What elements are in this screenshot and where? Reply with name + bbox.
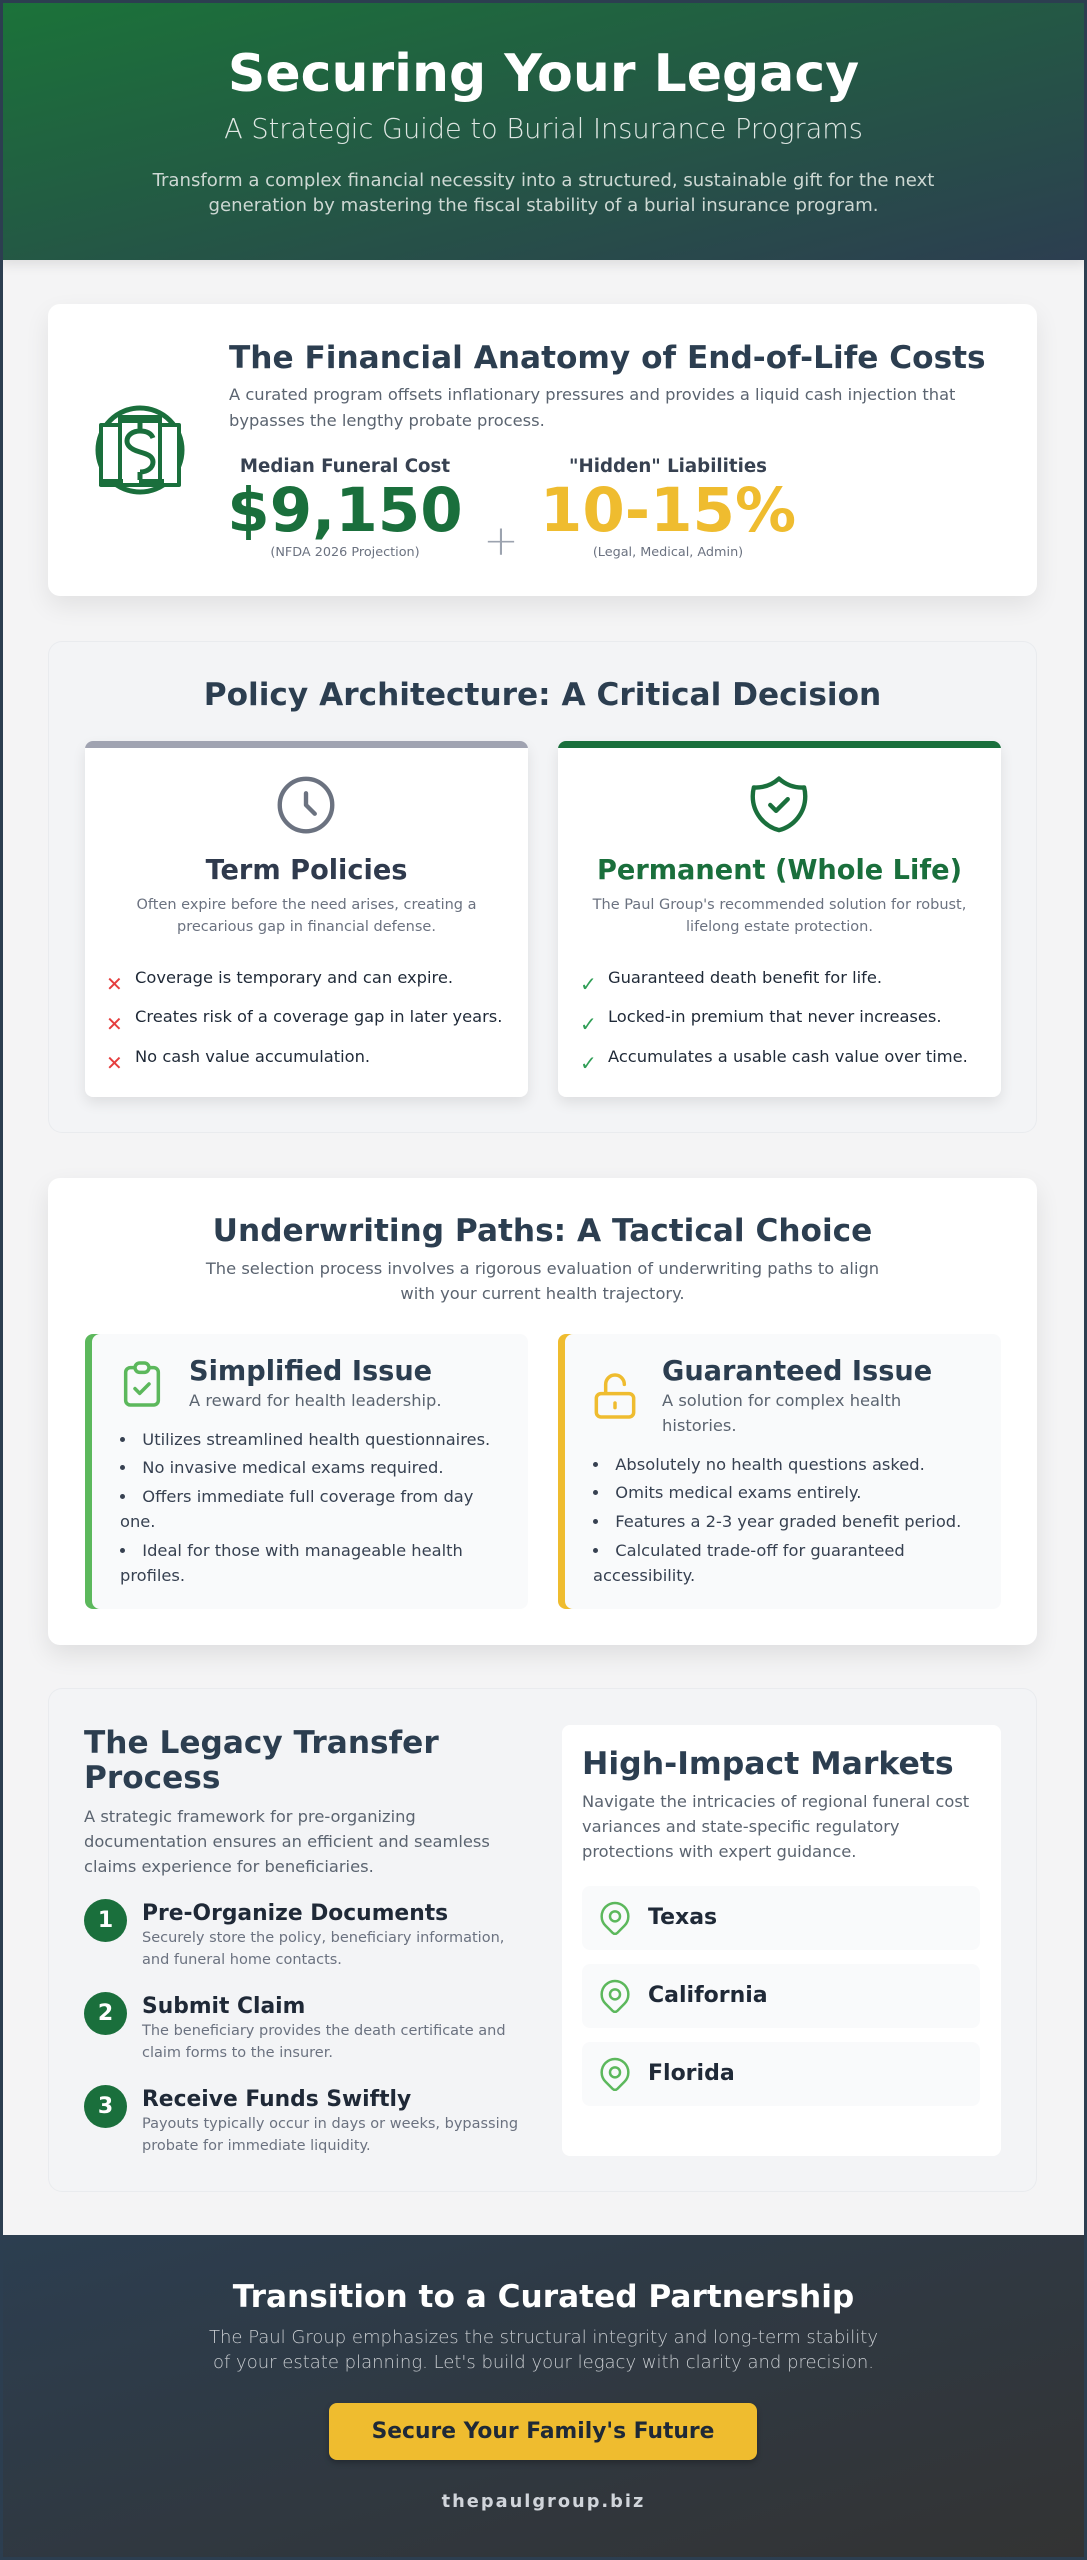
card heading: Term Policies — [206, 855, 407, 886]
card top bar — [85, 741, 528, 748]
panel: underwriting paths — [48, 1178, 1037, 1645]
list: term drawbacks — [106, 968, 502, 1074]
list: term drawbacks: ✕ — [106, 1050, 123, 1074]
section text: A strategic framework for pre-organizing — [84, 1806, 416, 1826]
card heading: Permanent (Whole Life) — [597, 855, 962, 886]
market name: Florida — [648, 2061, 735, 2086]
section heading: Underwriting Paths: A Tactical Choice — [213, 1213, 872, 1249]
step 3 — [84, 2085, 518, 2154]
bullet list: Utilizes streamlined health questionnaires. — [142, 1430, 490, 1448]
panel: policy architecture — [48, 641, 1037, 1133]
bullet list: Absolutely no health questions asked. — [615, 1454, 925, 1474]
panel: legacy transfer and markets — [48, 1688, 1037, 2192]
website link: thepaulgroup.biz — [442, 2491, 645, 2512]
card top bar — [558, 741, 1001, 748]
card heading: High-Impact Markets — [582, 1746, 954, 1782]
list: permanent benefits: ✓ — [580, 1012, 597, 1036]
title: Securing Your Legacy — [228, 44, 859, 104]
step text — [142, 1930, 504, 1968]
section text — [84, 1806, 490, 1876]
call to action button: Secure Your Family's Future — [372, 2419, 714, 2444]
section text — [229, 385, 955, 430]
step number: 3 — [98, 2094, 113, 2119]
card description: lifelong estate protection. — [686, 919, 873, 935]
section heading: Process — [84, 1760, 220, 1796]
step number — [84, 2085, 127, 2128]
card: high-impact markets — [562, 1725, 1001, 2156]
market: Texas — [582, 1886, 980, 1950]
card text: histories. — [662, 1416, 737, 1435]
section text: bypasses the lengthy probate process. — [229, 411, 545, 430]
icon: map pin — [600, 1980, 630, 2013]
section text — [206, 1259, 879, 1303]
card text: A solution for complex health — [662, 1391, 901, 1410]
icon: clock — [278, 776, 334, 834]
market name: California — [648, 1983, 768, 2008]
section heading: The Legacy Transfer — [84, 1724, 439, 1760]
section text: A curated program offsets inflationary pressures and provides a liquid cash injection that — [229, 385, 955, 404]
card text — [662, 1391, 901, 1435]
bullet list: profiles. — [120, 1566, 185, 1585]
step 1 — [84, 1899, 504, 1968]
card: simplified issue — [85, 1334, 528, 1609]
intro text — [152, 170, 934, 216]
icon: open lock — [594, 1373, 636, 1419]
step number: 2 — [98, 2001, 113, 2026]
stat: hidden liabilities: (Legal, Medical, Admin) — [593, 545, 743, 560]
bullet list: Omits medical exams entirely. — [615, 1483, 861, 1502]
market name: Texas — [648, 1905, 717, 1930]
card description — [592, 897, 966, 935]
card text: protections with expert guidance. — [582, 1842, 856, 1861]
section heading — [84, 1724, 439, 1796]
step text: claim forms to the insurer. — [142, 2045, 333, 2061]
bullet list — [120, 1430, 490, 1585]
list: term drawbacks: No cash value accumulation. — [135, 1046, 370, 1066]
bullet list: Features a 2-3 year graded benefit period. — [615, 1512, 961, 1531]
step text: The beneficiary provides the death certificate and — [142, 2023, 506, 2039]
call to action button — [329, 2403, 757, 2460]
step 2 — [84, 1992, 506, 2061]
bullet list — [593, 1454, 961, 1585]
stat: median funeral cost: $9,150 — [227, 475, 463, 546]
step text: and funeral home contacts. — [142, 1952, 342, 1968]
header banner — [0, 0, 1087, 260]
icon: map pin — [600, 1902, 630, 1935]
card: permanent whole life — [558, 741, 1001, 1097]
stat: hidden liabilities: "Hidden" Liabilities — [569, 456, 767, 477]
list: permanent benefits: ✓ — [580, 972, 597, 996]
list: term drawbacks: ✕ — [106, 1012, 123, 1036]
list: permanent benefits: ✓ — [580, 1050, 597, 1074]
section text: with your current health trajectory. — [400, 1284, 685, 1303]
step text — [142, 2116, 518, 2154]
icon: banknotes in circle — [96, 406, 184, 494]
list: term drawbacks: Creates risk of a coverage gap in later years. — [135, 1007, 502, 1026]
section text: claims experience for beneficiaries. — [84, 1857, 374, 1876]
card: term policies — [85, 741, 528, 1097]
card description: Often expire before the need arises, creating a — [136, 897, 476, 913]
card: guaranteed issue — [558, 1334, 1001, 1609]
list: term drawbacks: Coverage is temporary and can expire. — [135, 968, 453, 986]
market: California — [582, 1964, 980, 2028]
stat: hidden liabilities — [540, 456, 796, 560]
intro text: generation by mastering the fiscal stability of a burial insurance program. — [209, 195, 878, 216]
card description: The Paul Group's recommended solution for robust, — [593, 897, 966, 913]
list: permanent benefits: Guaranteed death benefit for life. — [608, 968, 882, 986]
card description: precarious gap in financial defense. — [177, 919, 436, 935]
plus sign: + — [483, 516, 519, 565]
subtitle: A Strategic Guide to Burial Insurance Programs — [224, 114, 863, 145]
step text: probate for immediate liquidity. — [142, 2138, 371, 2154]
panel: financial anatomy — [48, 304, 1037, 596]
section text: The selection process involves a rigorous evaluation of underwriting paths to align — [206, 1259, 879, 1278]
step title: Submit Claim — [142, 1994, 305, 2019]
icon: shield check — [750, 776, 808, 832]
market: Florida — [582, 2042, 980, 2106]
stat: median funeral cost — [227, 456, 463, 560]
footer text: of your estate planning. Let's build your legacy with clarity and precision. — [213, 2352, 874, 2373]
section heading: Policy Architecture: A Critical Decision — [204, 677, 881, 713]
icon: clipboard check — [124, 1361, 160, 1407]
card text: A reward for health leadership. — [189, 1391, 442, 1410]
step text — [142, 2023, 506, 2061]
card heading: Simplified Issue — [189, 1356, 432, 1387]
stat: median funeral cost: (NFDA 2026 Projection) — [270, 545, 420, 560]
step number: 1 — [98, 1908, 113, 1933]
bullet list: Offers immediate full coverage from day — [142, 1487, 473, 1506]
icon: map pin — [600, 2058, 630, 2091]
bullet list: No invasive medical exams required. — [142, 1458, 444, 1477]
list: permanent benefits — [580, 968, 968, 1074]
card heading: Guaranteed Issue — [662, 1356, 932, 1387]
stat: hidden liabilities: 10-15% — [540, 475, 796, 546]
stat: median funeral cost: Median Funeral Cost — [240, 456, 450, 477]
card text — [582, 1792, 969, 1861]
step title: Pre-Organize Documents — [142, 1901, 448, 1926]
intro text: Transform a complex financial necessity into a structured, sustainable gift for the next — [153, 170, 934, 190]
list: permanent benefits: Locked-in premium that never increases. — [608, 1007, 942, 1026]
bullet list: accessibility. — [593, 1566, 695, 1585]
list: permanent benefits: Accumulates a usable cash value over time. — [608, 1046, 968, 1066]
card text: variances and state-specific regulatory — [582, 1817, 900, 1836]
bullet list: one. — [120, 1512, 155, 1531]
step title: Receive Funds Swiftly — [142, 2087, 411, 2112]
step text: Payouts typically occur in days or weeks, bypassing — [142, 2116, 518, 2132]
step number — [84, 1992, 127, 2035]
footer text: The Paul Group emphasizes the structural integrity and long-term stability — [209, 2327, 878, 2348]
footer text — [209, 2327, 878, 2373]
footer heading: Transition to a Curated Partnership — [233, 2279, 854, 2315]
section heading: The Financial Anatomy of End-of-Life Costs — [229, 340, 986, 376]
list: term drawbacks: ✕ — [106, 972, 123, 996]
step number — [84, 1899, 127, 1942]
step text: Securely store the policy, beneficiary information, — [142, 1930, 504, 1946]
bullet list: Ideal for those with manageable health — [142, 1541, 463, 1560]
bullet list: Calculated trade-off for guaranteed — [615, 1541, 905, 1560]
footer band — [0, 2235, 1087, 2560]
card description — [136, 897, 476, 935]
card text: Navigate the intricacies of regional funeral cost — [582, 1792, 969, 1811]
section text: documentation ensures an efficient and seamless — [84, 1832, 490, 1851]
